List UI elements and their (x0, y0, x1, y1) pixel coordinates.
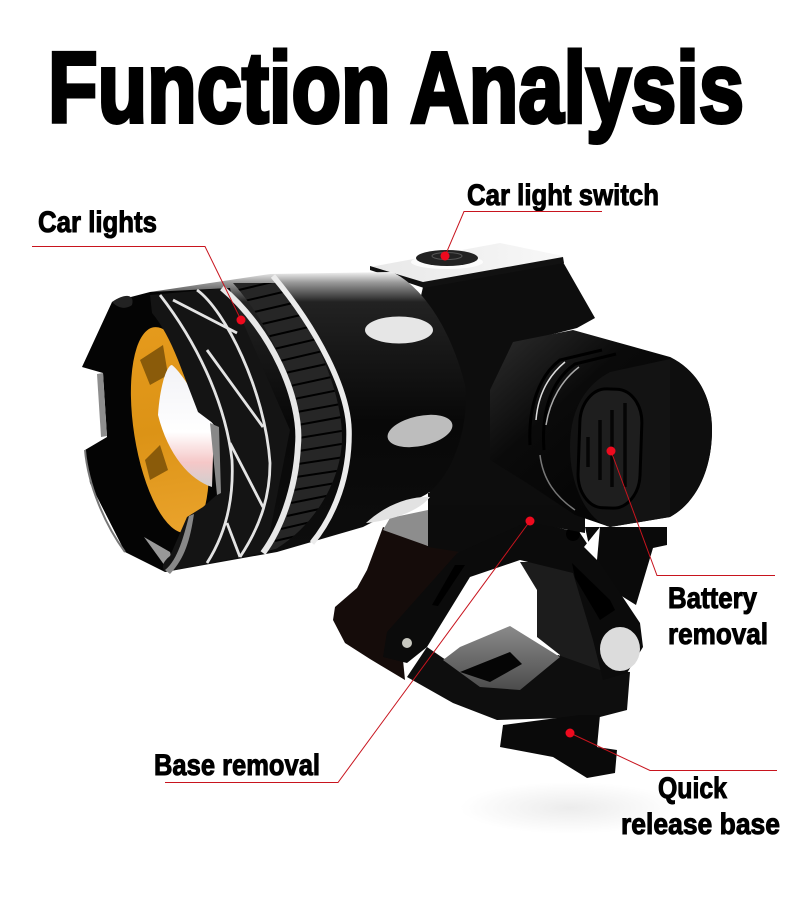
front ring chevrons (160, 290, 270, 563)
callout: battery removal: Battery (668, 582, 757, 615)
oval badge sliver (366, 497, 430, 523)
callout: car lights: Car lights (38, 206, 157, 239)
battery cap button (577, 388, 643, 509)
mount: rear bracket (585, 527, 667, 605)
mount: rubber pad (443, 626, 560, 690)
reflector facets (140, 345, 168, 480)
mount: upper clamp (383, 520, 643, 680)
mount: back band (520, 562, 605, 685)
mount: left arm (333, 527, 460, 680)
hole behind clamp (584, 527, 600, 560)
callout: quick release base: Quick (658, 772, 727, 805)
bolt (402, 638, 412, 648)
bezel tab (210, 423, 221, 495)
battery cap (570, 359, 670, 527)
callout: base removal: Base removal (154, 749, 320, 782)
mount: lower clamp (407, 647, 630, 720)
mount: quick release knob (500, 715, 617, 778)
callout: battery removal: removal (668, 618, 768, 651)
flashlight product (82, 243, 712, 834)
lens (158, 365, 214, 487)
switch block (370, 243, 595, 505)
silver band front (222, 288, 298, 553)
front ring (150, 288, 290, 572)
reflector (118, 322, 222, 538)
oval badge upper (365, 316, 433, 344)
power button (411, 255, 483, 269)
ground shadow (460, 782, 680, 834)
silver band rear (273, 276, 349, 543)
focus ring (233, 283, 342, 550)
battery housing (490, 330, 712, 527)
callout: quick release base (566, 728, 780, 841)
battery cap ribs (588, 403, 625, 487)
silver pin (600, 627, 640, 671)
callout: car light switch (440, 179, 659, 260)
mount: platform (428, 493, 585, 552)
front bezel (82, 288, 260, 572)
callout: car lights (32, 206, 246, 324)
battery collar grooves (530, 350, 616, 450)
bezel notches (97, 373, 107, 437)
lamp body tube (150, 272, 466, 572)
callout: base removal (154, 516, 534, 782)
callout: battery removal (606, 446, 775, 651)
callout: car light switch: Car light switch (467, 179, 659, 212)
mount: metal connector (383, 510, 428, 546)
oval badge lower (385, 409, 455, 453)
